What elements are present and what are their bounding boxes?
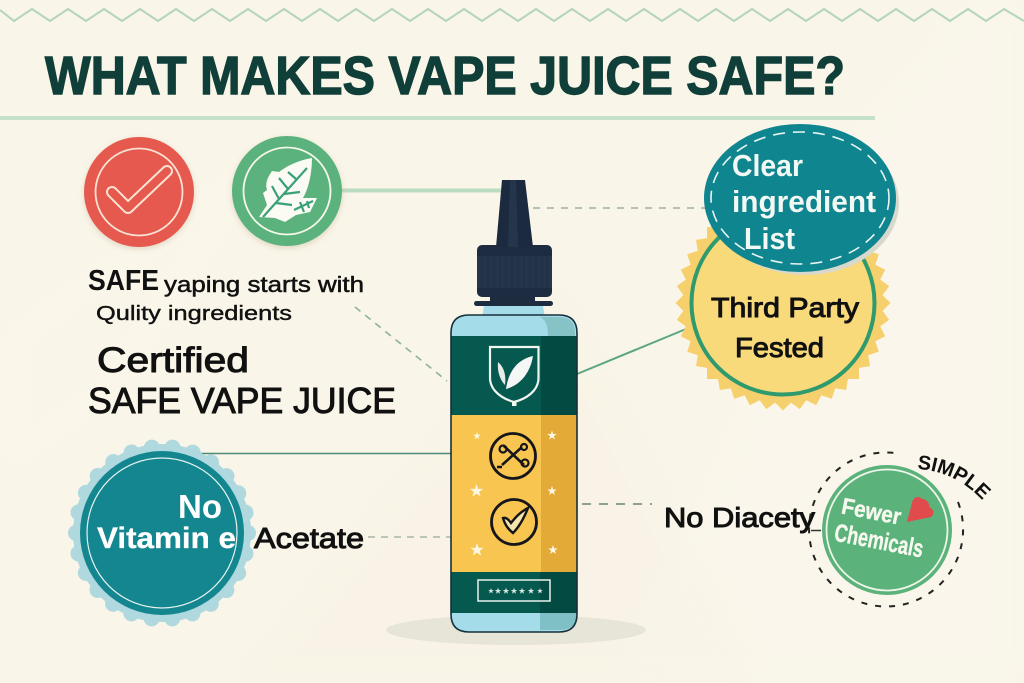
badge: no vitamin e: No	[178, 488, 222, 525]
badge: third party tested	[676, 196, 890, 410]
connector lines	[190, 190, 705, 537]
icon: red heart	[907, 497, 933, 522]
bottle	[451, 180, 577, 632]
badge: third party tested: Fested	[735, 332, 824, 363]
icon: shield leaf	[490, 347, 538, 406]
bottle shadow	[386, 615, 646, 645]
icon: red check badge	[84, 137, 194, 249]
bottle stars	[470, 430, 558, 556]
text: safe vaping: SAFE	[88, 265, 159, 297]
badge: clear ingredient list	[704, 124, 899, 275]
badge: fewer chemicals	[809, 452, 963, 606]
badge: clear ingredient list: List	[744, 221, 795, 256]
text: acetate: Acetate	[254, 523, 364, 555]
text: safe vaping: yaping starts with	[164, 272, 364, 297]
badge: fewer chemicals: Chemicals	[832, 519, 926, 563]
badge: clear ingredient list: ingredient	[732, 184, 876, 219]
badge: no vitamin e	[73, 444, 251, 622]
bottle label stars	[478, 580, 550, 601]
text: certified safe vape juice: Certified	[97, 341, 249, 380]
icon: crossed tools	[490, 434, 536, 478]
icon: circled check	[492, 500, 536, 544]
text: safe vaping: Qulity ingredients	[96, 303, 292, 325]
icon: green leaf badge	[232, 136, 342, 248]
text: certified safe vape juice	[88, 341, 396, 421]
text: no diacety: No Diacety	[664, 502, 815, 533]
badge: third party tested: Third Party	[711, 292, 859, 323]
badge: fewer chemicals: Fewer	[840, 493, 903, 530]
title: WHAT MAKES VAPE JUICE SAFE?	[45, 46, 845, 106]
badge: no vitamin e: Vitamin e	[97, 522, 236, 555]
text: safe vaping	[88, 265, 364, 325]
bottle body	[451, 315, 577, 632]
badge: clear ingredient list: Clear	[732, 148, 803, 183]
text: certified safe vape juice: SAFE VAPE JUICE	[88, 380, 396, 421]
text: simple: SIMPLE	[918, 456, 992, 500]
